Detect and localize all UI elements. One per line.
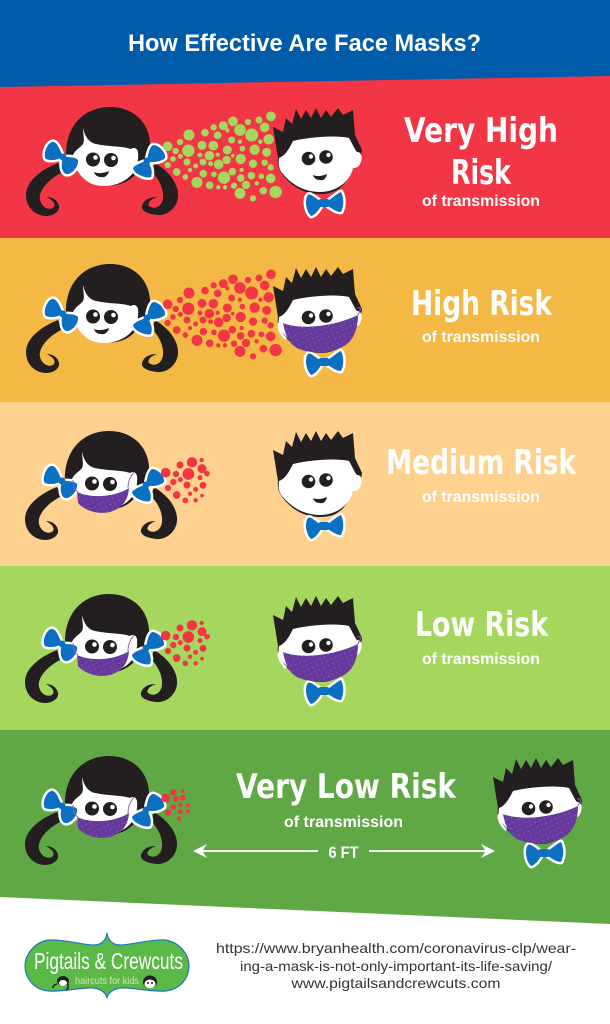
logo: pigtails and crewcuts: Pigtails & Crewcuts [34, 948, 183, 974]
icon: green droplets [163, 112, 281, 201]
icon: girl without mask [26, 264, 178, 373]
icon: red droplets [163, 270, 281, 359]
row: high risk [26, 264, 553, 375]
icon: small girl [53, 976, 69, 990]
row: very high risk [26, 107, 558, 216]
panel: low risk background [0, 566, 610, 730]
icon: boy with mask [493, 758, 582, 866]
panel: very high risk background [0, 70, 610, 238]
icon: boy without mask [273, 431, 362, 539]
icon: small boy [143, 976, 157, 988]
source links: www.pigtailsandcrewcuts.com [290, 975, 500, 991]
heading: very high risk: Very High [404, 111, 558, 151]
panel: high risk background [0, 238, 610, 402]
logo: pigtails and crewcuts [25, 933, 189, 998]
icon: red droplets [161, 621, 209, 666]
icon: red droplets [162, 790, 189, 820]
subheading: of transmission [284, 814, 403, 831]
heading: high risk: High Risk [411, 284, 553, 324]
subheading: of transmission [422, 489, 540, 506]
icon: boy with mask [273, 267, 362, 375]
subheading: of transmission [422, 193, 540, 210]
source links: https://www.bryanhealth.com/coronavirus-clp/wear- [216, 940, 576, 956]
icon: girl with mask [25, 431, 177, 540]
subheading: of transmission [422, 329, 540, 346]
heading: very high risk [404, 111, 558, 193]
logo: pigtails and crewcuts: haircuts for kids [75, 976, 139, 987]
heading: low risk: Low Risk [415, 605, 549, 645]
arrow: left [193, 844, 318, 858]
title: How Effective Are Face Masks? [128, 30, 481, 57]
icon: girl with mask [25, 756, 177, 865]
icon: girl without mask [26, 107, 178, 216]
icon: boy without mask [273, 108, 362, 216]
source links: ing-a-mask-is-not-only-important-its-life-saving/ [240, 958, 552, 974]
row: low risk [25, 594, 549, 704]
icon: girl with mask [25, 594, 177, 703]
source links [216, 940, 576, 991]
title banner [0, 0, 610, 87]
row: very low risk [25, 756, 582, 866]
heading: very high risk: Risk [451, 153, 512, 193]
panel: medium risk background [0, 402, 610, 566]
arrow: right [369, 844, 495, 858]
subheading: of transmission [422, 651, 540, 668]
row: medium risk [25, 431, 577, 540]
label: 6 ft distance: 6 FT [328, 843, 359, 862]
panel: very low risk background [0, 730, 610, 924]
heading: very low risk: Very Low Risk [236, 767, 457, 807]
icon: red droplets [161, 458, 209, 503]
icon: boy with mask [273, 596, 362, 704]
